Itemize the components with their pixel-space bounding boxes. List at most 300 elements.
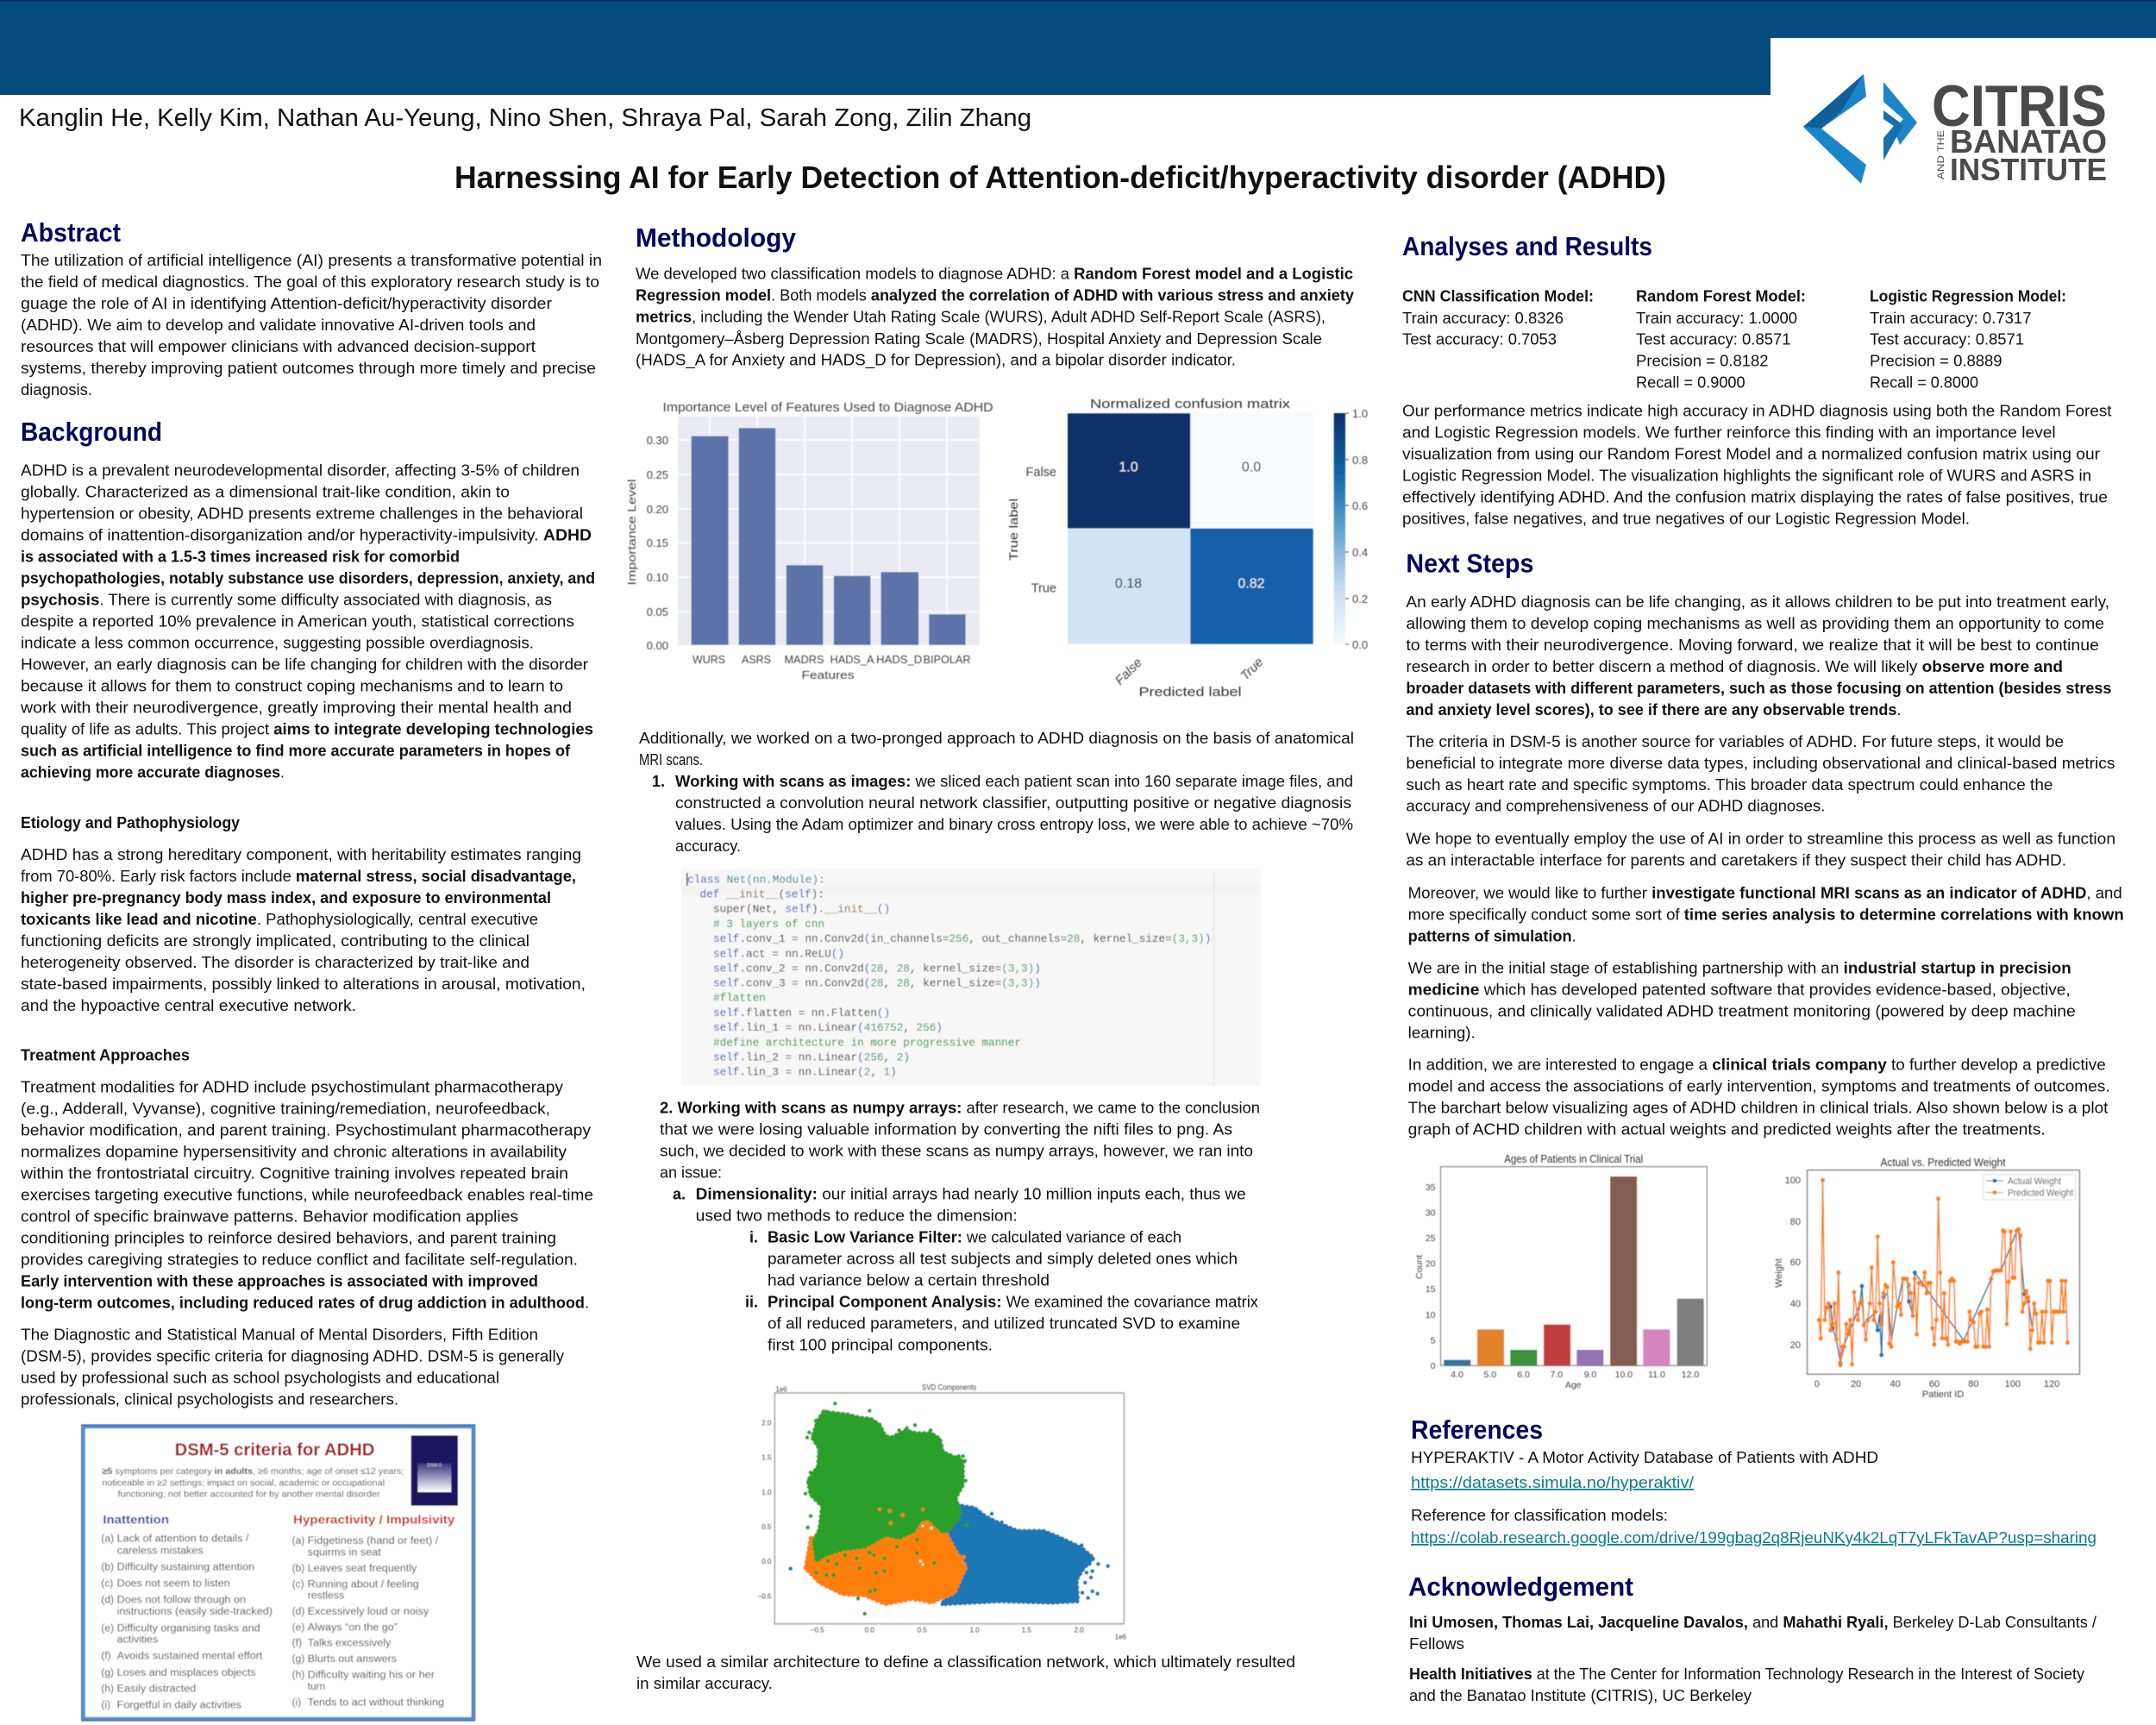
chart: ages of patients bars: 10.0 <box>1615 1370 1633 1380</box>
chart: normalized confusion matrix: True <box>1031 581 1056 595</box>
chart: ages of patients bars: 7.0 <box>1550 1370 1563 1380</box>
logo: CITRIS Banatao Institute: THE <box>1936 130 1946 152</box>
text: methodology intro: (HADS_A for Anxiety and HADS_D for Depression), and a bipolar disorder indicator. <box>636 352 1236 370</box>
text: acknowledgement: Health Initiatives at the The Center for Information Technology Research in the Interest of Society <box>1409 1665 2084 1683</box>
chart: ages of patients bars: 0 <box>1431 1361 1436 1371</box>
chart: normalized confusion matrix: False <box>1112 656 1145 688</box>
text: MRI approach: constructed a convolution neural network classifier, outputting positive or negative diagnosis <box>675 794 1351 812</box>
text: next steps paragraph 2: such as heart rate and specific symptoms. This broader data spectrum could enhance the <box>1406 776 2053 794</box>
code block: CNN class <box>681 869 1261 1086</box>
chart: actual vs predicted weight: 20 <box>1851 1379 1861 1389</box>
chart: actual vs predicted weight: 120 <box>2044 1379 2059 1389</box>
code block: CNN class: #define architecture in more progressive manner <box>713 1036 1021 1049</box>
chart: SVD components scatter: 0.0 <box>865 1627 874 1634</box>
text: MRI approach: values. Using the Adam optimizer and binary cross entropy loss, we were able to achieve ~70% <box>675 816 1353 833</box>
text: etiology: toxicants like lead and nicotine . Pathophysiologically, central executive <box>21 911 538 928</box>
text: methodology intro: Regression model. Both models analyzed the correlation of ADHD with various stress and anxiety <box>636 286 1354 304</box>
text: next steps paragraph 5: We are in the initial stage of establishing partnership with an industrial startup in precision <box>1408 959 2071 976</box>
legend: Actual Weight <box>2008 1176 2061 1187</box>
Hyperactivity list: Tends to act without thinking <box>308 1696 444 1708</box>
table: Random Forest metrics <box>1636 288 1806 391</box>
chart: normalized confusion matrix: 0.4 <box>1352 546 1368 559</box>
chart: actual vs predicted weight: Actual vs. Predicted Weight <box>1880 1156 2006 1169</box>
text: next steps paragraph 1: broader datasets with different parameters, such as those focusing on attention (besides stress <box>1406 680 2111 697</box>
DSM intro: ≥5 symptoms per category in adults, ≥6 months; age of onset ≤12 years; <box>102 1467 404 1477</box>
text: results summary: visualization from using our Random Forest Model and a normalized confusion matrix using our <box>1402 445 2100 462</box>
chart: feature importance bars: Importance Level of Features Used to Diagnose ADHD <box>662 400 993 415</box>
Inattention list: (g) <box>101 1666 114 1678</box>
Hyperactivity list: Always “on the go” <box>308 1621 398 1633</box>
text: acknowledgement <box>1409 1614 2096 1704</box>
table: Random Forest metrics: Precision = 0.8182 <box>1636 352 1769 369</box>
table: Logistic Regression metrics: Precision = 0.8889 <box>1870 352 2002 369</box>
table: CNN model metrics <box>1402 288 1594 348</box>
chart: feature importance bars <box>625 400 993 681</box>
chart: normalized confusion matrix: False <box>1026 466 1056 480</box>
DSM intro: noticeable in ≥2 settings; impact on social, academic or occupational <box>102 1478 385 1488</box>
code block: CNN class: self.lin_1 = nn.Linear(416752, 256) <box>713 1021 943 1034</box>
text: background: globally. Characterized as a dimensional trait-like condition, akin to <box>21 484 510 501</box>
chart: ages of patients bars: 4.0 <box>1451 1370 1463 1380</box>
chart: SVD components scatter: 1.0 <box>761 1489 772 1496</box>
chart: actual vs predicted weight: 40 <box>1890 1379 1901 1389</box>
Inattention list: (h) <box>101 1682 114 1694</box>
heading: Methodology: Methodology <box>636 223 797 253</box>
chart: ages of patients bars: 20 <box>1426 1259 1436 1270</box>
text: next steps paragraph 1: An early ADHD diagnosis can be life changing, as it allows children to be put into treatment early, <box>1406 593 2109 611</box>
text: numpy approach: a. <box>673 1185 686 1202</box>
chart: SVD components scatter: 1.5 <box>1022 1627 1031 1634</box>
chart: actual vs predicted weight <box>1774 1156 2079 1400</box>
text: next steps paragraph 1: research in order to better discern a method of diagnosis. We will likely observe more and <box>1406 658 2063 675</box>
chart: SVD components scatter: 0.0 <box>761 1558 772 1565</box>
chart: ages of patients bars: 5 <box>1431 1335 1436 1346</box>
Hyperactivity list: Leaves seat frequently <box>308 1562 417 1574</box>
chart: normalized confusion matrix: Predicted label <box>1138 685 1242 699</box>
code block: CNN class: super(Net, self).__init__() <box>713 903 890 916</box>
text: etiology: state-based impairments, possibly linked to alterations in arousal, motivation, <box>21 975 586 993</box>
chart: SVD components scatter: −0.5 <box>811 1627 824 1634</box>
table: Logistic Regression metrics: Logistic Regression Model: <box>1870 288 2066 305</box>
chart: normalized confusion matrix: Normalized confusion matrix <box>1090 397 1291 411</box>
chart: SVD components scatter: 0.5 <box>761 1523 772 1531</box>
Hyperactivity list: (h) <box>292 1669 304 1681</box>
text: DSM-5 description: used by professional such as school psychologists and educational <box>21 1370 499 1387</box>
Hyperactivity list: Blurts out answers <box>308 1653 397 1665</box>
Hyperactivity list: (g) <box>292 1653 304 1665</box>
code block: CNN class: self.lin_2 = nn.Linear(256, 2) <box>713 1051 910 1063</box>
legend <box>1984 1175 2076 1200</box>
chart: normalized confusion matrix: 0.8 <box>1352 454 1368 467</box>
title: Harnessing AI for Early Detection of Attention-deficit/hyperactivity disorder (ADHD) <box>454 160 1666 195</box>
chart: feature importance bars: Importance Level <box>625 479 638 585</box>
text: results summary: and Logistic Regression models. We further reinforce this finding with an importance level <box>1402 424 2056 442</box>
text: treatment: exercises targeting executive functions, while neurofeedback enables real-time <box>21 1187 593 1204</box>
text: next steps paragraph 6: In addition, we are interested to engage a clinical trials company to further develop a predictive <box>1408 1057 2106 1074</box>
text: abstract: (ADHD). We aim to develop and validate innovative AI-driven tools and <box>21 317 536 334</box>
chart: actual vs predicted weight: 100 <box>1785 1176 1801 1186</box>
Inattention list: Avoids sustained mental effort <box>117 1650 263 1662</box>
chart: ages of patients bars: 12.0 <box>1682 1370 1699 1380</box>
table: Logistic Regression metrics: Recall = 0.8000 <box>1870 373 1978 391</box>
text: next steps paragraph 3: as an interactable interface for parents and caretakers if they suspect their child has ADHD. <box>1406 851 2066 869</box>
logo: CITRIS Banatao Institute: INSTITUTE <box>1950 152 2107 187</box>
text: next steps paragraph 4 <box>1408 884 2124 944</box>
chart: ages of patients bars: 5.0 <box>1483 1370 1496 1380</box>
text: background: psychosis. There is currently some difficulty associated with diagnosis, as <box>21 592 552 609</box>
Hyperactivity list: Excessively loud or noisy <box>308 1605 429 1617</box>
text: background: such as artificial intelligence to find more accurate parameters in hopes of <box>21 743 571 760</box>
heading: Next Steps: Next Steps <box>1406 548 1533 578</box>
chart: actual vs predicted weight: 60 <box>1929 1379 1940 1389</box>
Inattention list: (e) <box>101 1622 114 1634</box>
text: next steps paragraph 1: allowing them to develop coping mechanisms as well as providing them an opportunity to come <box>1406 615 2104 632</box>
Inattention list: Inattention <box>103 1513 169 1527</box>
chart: ages of patients bars: 30 <box>1426 1208 1436 1218</box>
text: next steps paragraph 2: accuracy and comprehensiveness of our ADHD diagnoses. <box>1406 798 1825 815</box>
text: methodology intro: We developed two classification models to diagnose ADHD: a Random Forest model and a Logistic <box>636 266 1353 283</box>
table: Random Forest metrics: Random Forest Model: <box>1636 288 1806 305</box>
text: MRI approach: accuracy. <box>675 837 741 855</box>
text: MRI approach: MRI scans. <box>639 751 703 768</box>
table: Logistic Regression metrics <box>1870 288 2066 391</box>
heading: Abstract: Abstract <box>21 217 121 248</box>
chart: SVD components scatter: 1.0 <box>969 1627 980 1634</box>
text: background: because it allows for them to construct coping mechanisms and to learn to <box>21 678 563 695</box>
text: next steps paragraph 4: Moreover, we would like to further investigate functional MRI scans as an indicator of ADHD , and <box>1408 884 2122 901</box>
text: MRI approach: 1. <box>652 773 665 790</box>
text: abstract <box>21 252 602 398</box>
chart: SVD components scatter: 2.0 <box>1074 1627 1084 1634</box>
text: next steps paragraph 6: The barchart below visualizing ages of ADHD children in clinical trials. Also shown below is a plot <box>1408 1100 2108 1117</box>
text: treatment: long-term outcomes, including reduced rates of drug addiction in adulthood. <box>21 1294 589 1311</box>
chart: feature importance bars: 0.05 <box>647 605 668 618</box>
table: CNN model metrics: Train accuracy: 0.8326 <box>1402 310 1564 327</box>
text: background: hypertension or obesity, ADHD presents extreme challenges in the behavioral <box>21 505 583 523</box>
chart: feature importance bars: MADRS <box>785 653 824 666</box>
Hyperactivity list: (i) <box>292 1696 301 1708</box>
table: Logistic Regression metrics: Test accuracy: 0.8571 <box>1870 331 2024 348</box>
chart: SVD components scatter: 2.0 <box>761 1419 772 1427</box>
text: treatment: Early intervention with these approaches is associated with improved <box>21 1273 538 1290</box>
chart: ages of patients bars: Count <box>1414 1255 1425 1279</box>
table: Random Forest metrics: Recall = 0.9000 <box>1636 373 1745 391</box>
legend: Predicted Weight <box>2008 1189 2073 1199</box>
text: treatment <box>20 1078 593 1311</box>
text: abstract: the field of medical diagnostics. The goal of this exploratory research study is to <box>21 273 599 291</box>
chart: actual vs predicted weight: 80 <box>1790 1217 1801 1227</box>
DSM book cover <box>411 1435 458 1506</box>
Hyperactivity list <box>292 1513 455 1708</box>
code block: CNN class: self.lin_3 = nn.Linear(2, 1) <box>713 1066 897 1079</box>
Hyperactivity list: (c) <box>292 1578 304 1590</box>
text: numpy approach: Principal Component Analysis: We examined the covariance matrix <box>768 1294 1258 1311</box>
chart: normalized confusion matrix: True <box>1238 655 1266 683</box>
text: background: ADHD is a prevalent neurodevelopmental disorder, affecting 3-5% of children <box>21 462 580 480</box>
code block: CNN class: self.flatten = nn.Flatten() <box>713 1007 890 1019</box>
scatter clusters <box>788 1402 1110 1615</box>
text: etiology: higher pre-pregnancy body mass index, and exposure to environmental <box>21 889 551 906</box>
chart: feature importance bars: BIPOLAR <box>923 653 971 666</box>
table: Random Forest metrics: Train accuracy: 1.0000 <box>1636 310 1797 327</box>
text: similar architecture: in similar accuracy. <box>636 1675 773 1692</box>
text: next steps paragraph 1 <box>1406 593 2111 718</box>
Inattention list: Difficulty sustaining attention <box>117 1560 254 1572</box>
logo: CITRIS Banatao Institute: BANATAO <box>1950 124 2107 160</box>
text: results summary: Logistic Regression Model. The visualization highlights the significant role of WURS and ASRS in <box>1402 467 2091 485</box>
text: background: quality of life as adults. This project aims to integrate developing technologies <box>21 721 593 738</box>
chart: actual vs predicted weight: 20 <box>1790 1340 1801 1351</box>
text: MRI approach: Additionally, we worked on a two-pronged approach to ADHD diagnosis on the basis of anatomical <box>639 730 1354 747</box>
Hyperactivity list: (e) <box>292 1621 304 1633</box>
chart: SVD components scatter: 1e6 <box>1115 1634 1127 1641</box>
text: acknowledgement: and the Banatao Institute (CITRIS), UC Berkeley <box>1409 1687 1752 1704</box>
panel: DSM-5 criteria for ADHD <box>82 1425 475 1721</box>
chart: SVD components scatter <box>758 1383 1127 1641</box>
chart: normalized confusion matrix: True label <box>1006 499 1020 561</box>
text: treatment: Treatment modalities for ADHD include psychostimulant pharmacotherapy <box>21 1078 563 1095</box>
chart: SVD components scatter: −0.5 <box>758 1592 772 1600</box>
text: etiology: functioning deficits are strongly implicated, contributing to the clinical <box>21 932 530 950</box>
text: background: indicate a less common occurrence, suggesting possible overdiagnosis. <box>21 635 534 652</box>
chart: ages of patients bars: 25 <box>1426 1233 1436 1244</box>
chart: normalized confusion matrix: 1.0 <box>1352 407 1368 420</box>
Hyperactivity list: Hyperactivity / Impulsivity <box>293 1513 455 1527</box>
Hyperactivity list: squirms in seat <box>308 1546 381 1559</box>
text: next steps paragraph 2 <box>1406 733 2115 815</box>
text: treatment: conditioning principles to reinforce desired behaviors, and parent training <box>21 1230 556 1247</box>
chart: actual vs predicted weight: 40 <box>1790 1299 1801 1309</box>
text: numpy approach: used two methods to reduce the dimension: <box>696 1208 1018 1225</box>
chart: ages of patients bars: 11.0 <box>1648 1370 1665 1380</box>
Hyperactivity list: (d) <box>292 1605 304 1617</box>
text: treatment: behavior modification, and parent training. Psychostimulant pharmacotherapy <box>21 1121 591 1138</box>
heading: Background: Background <box>21 417 162 447</box>
chart: feature importance bars: 0.00 <box>647 639 668 652</box>
text: DSM-5 description <box>21 1327 564 1408</box>
text: treatment: control of specific brainwave patterns. Behavior modification applies <box>21 1208 518 1225</box>
text: acknowledgement: Fellows <box>1409 1635 1464 1653</box>
text: numpy approach: such, we decided to work with these scans as numpy arrays, however, we ran into <box>660 1143 1253 1160</box>
heading: References: References <box>1411 1414 1543 1445</box>
authors: Kanglin He, Kelly Kim, Nathan Au-Yeung, Nino Shen, Shraya Pal, Sarah Zong, Zilin Zhang <box>19 104 1031 132</box>
chart: actual vs predicted weight: 80 <box>1968 1379 1979 1389</box>
text: etiology: from 70-80%. Early risk factors include maternal stress, social disadvantage, <box>21 868 576 885</box>
chart: ages of patients bars: Age <box>1565 1380 1582 1390</box>
Inattention list: (i) <box>101 1699 110 1711</box>
code block: CNN class: # 3 layers of cnn <box>713 918 824 931</box>
chart: feature importance bars: 0.25 <box>647 468 668 481</box>
Hyperactivity list: (a) <box>292 1534 304 1546</box>
text: similar architecture: We used a similar architecture to define a classification network, which ultimately resulted <box>636 1653 1295 1671</box>
Inattention list: Forgetful in daily activities <box>117 1699 241 1711</box>
chart: SVD components scatter: 1.5 <box>761 1454 772 1462</box>
DSM intro <box>102 1467 404 1500</box>
Inattention list: (b) <box>101 1560 114 1572</box>
text: etiology <box>21 846 586 1014</box>
chart: normalized confusion matrix: 0.0 <box>1242 461 1261 474</box>
text: numpy approach <box>660 1100 1260 1354</box>
text: treatment: normalizes dopamine hypersensitivity and chronic alterations in availability <box>21 1144 567 1161</box>
Hyperactivity list: turn <box>308 1680 325 1692</box>
chart: feature importance bars: 0.10 <box>647 571 668 584</box>
DSM book cover: DSM-5 <box>427 1464 442 1469</box>
code block: CNN class: def __init__(self): <box>700 888 824 901</box>
chart: normalized confusion matrix <box>1006 397 1368 699</box>
code block: CNN class: self.conv_2 = nn.Conv2d(28, 28, kernel_size=(3,3)) <box>713 962 1041 975</box>
text: background: achieving more accurate diagnoses. <box>21 764 285 781</box>
chart: normalized confusion matrix: 0.18 <box>1115 576 1142 592</box>
table: Logistic Regression metrics: Train accuracy: 0.7317 <box>1870 310 2032 327</box>
Inattention list: (f) <box>101 1650 111 1662</box>
chart: ages of patients bars: 6.0 <box>1517 1370 1530 1380</box>
text: methodology intro <box>636 266 1354 370</box>
heading: Analyses and Results: Analyses and Results <box>1402 231 1652 261</box>
text: treatment: provides caregiving strategies to reduce conflict and facilitate self-regulation. <box>21 1251 578 1268</box>
Hyperactivity list: Fidgetiness (hand or feet) / <box>308 1534 439 1546</box>
text: next steps paragraph 1: to terms with their neurodivergence. Moving forward, we realize that it will be best to continue <box>1406 637 2099 654</box>
text: next steps paragraph 5: continuous, and clinically validated ADHD treatment monitoring (powered by deep machine <box>1408 1002 2076 1019</box>
Inattention list: Easily distracted <box>117 1682 196 1694</box>
chart: feature importance bars: 0.15 <box>647 536 668 549</box>
DSM intro: functioning; not better accounted for by another mental disorder <box>118 1490 380 1500</box>
text: next steps paragraph 5 <box>1408 959 2076 1041</box>
logo: CITRIS Banatao Institute: AND <box>1936 155 1946 179</box>
text: abstract: guage the role of AI in identifying Attention-deficit/hyperactivity disorder <box>21 295 552 312</box>
text: background: However, an early diagnosis can be life changing for children with the disorder <box>21 656 588 674</box>
text: methodology intro: Montgomery–Åsberg Depression Rating Scale (MADRS), Hospital Anxiety and Depression Scale <box>636 330 1322 348</box>
Inattention list: (c) <box>101 1577 113 1589</box>
text: background: work with their neurodivergence, greatly improving their mental health and <box>20 699 572 717</box>
chart: ages of patients bars: 9.0 <box>1584 1370 1596 1380</box>
chart: normalized confusion matrix: 1.0 <box>1119 461 1138 474</box>
text: numpy approach: an issue: <box>660 1164 722 1182</box>
subheading: Etiology and Pathophysiology: Etiology and Pathophysiology <box>21 814 240 831</box>
DSM title: DSM-5 criteria for ADHD <box>175 1441 374 1460</box>
Inattention list: (a) <box>101 1533 114 1545</box>
chart: actual vs predicted weight: Weight <box>1774 1258 1784 1288</box>
chart: normalized confusion matrix: 0.2 <box>1352 593 1368 605</box>
text: numpy approach: 2. Working with scans as numpy arrays: after research, we came to the conclusion <box>660 1100 1260 1117</box>
text: results summary: Our performance metrics indicate high accuracy in ADHD diagnosis using both the Random Forest <box>1402 403 2111 420</box>
text: next steps paragraph 1: and anxiety level scores), to see if there are any observable trends. <box>1406 701 1901 718</box>
Hyperactivity list: Running about / feeling <box>308 1578 419 1590</box>
Hyperactivity list: restless <box>308 1590 344 1602</box>
text: background: is associated with a 1.5-3 times increased risk for comorbid <box>21 549 460 566</box>
Hyperactivity list: Talks excessively <box>308 1637 391 1649</box>
text: numpy approach: Dimensionality: our initial arrays had nearly 10 million inputs each, thus we <box>696 1185 1246 1202</box>
code block: CNN class: self.conv_3 = nn.Conv2d(28, 28, kernel_size=(3,3)) <box>713 977 1041 990</box>
text: references <box>1411 1449 2096 1546</box>
text: references: https://colab.research.google.com/drive/199gbag2q8RjeuNKy4k2LqT7yLFkTavAP?usp=sharing <box>1411 1529 2096 1546</box>
text: etiology: ADHD has a strong hereditary component, with heritability estimates ranging <box>21 846 581 863</box>
text: references: Reference for classification models: <box>1411 1507 1668 1524</box>
text: abstract: systems, thereby improving patient outcomes through more timely and precise <box>21 360 596 377</box>
chart: normalized confusion matrix: 0.82 <box>1238 576 1265 592</box>
text: references: https://datasets.simula.no/hyperaktiv/ <box>1411 1474 1694 1491</box>
chart: ages of patients bars: Ages of Patients in Clinical Trial <box>1504 1152 1643 1165</box>
text: background: domains of inattention-disorganization and/or hyperactivity-impulsivity. ADHD <box>21 527 592 544</box>
text: numpy approach: of all reduced parameters, and utilized truncated SVD to examine <box>768 1314 1240 1332</box>
chart: SVD components scatter: 1e6 <box>775 1385 787 1393</box>
text: results summary <box>1402 403 2111 527</box>
Inattention list <box>101 1513 273 1711</box>
chart: feature importance bars: Features <box>802 668 855 681</box>
text: MRI approach: Working with scans as images: we sliced each patient scan into 160 separate image files, and <box>675 773 1353 790</box>
table: CNN model metrics: CNN Classification Model: <box>1402 288 1594 305</box>
chart: ages of patients bars <box>1414 1152 1707 1390</box>
text: next steps paragraph 6: model and access the associations of early intervention, symptoms and treatments of outcomes. <box>1408 1078 2110 1095</box>
code block: CNN class: #flatten <box>713 992 766 1005</box>
text: DSM-5 description: (DSM-5), provides specific criteria for diagnosing ADHD. DSM-5 is generally <box>21 1347 564 1364</box>
text: acknowledgement: Ini Umosen, Thomas Lai, Jacqueline Davalos, and Mahathi Ryali, Berkeley D-Lab Consultants / <box>1409 1614 2096 1631</box>
text: etiology: heterogeneity observed. The disorder is characterized by trait-like and <box>21 954 530 971</box>
Inattention list: Lack of attention to details / <box>117 1533 249 1545</box>
table: Random Forest metrics: Test accuracy: 0.8571 <box>1636 331 1790 348</box>
Hyperactivity list: (f) <box>292 1637 302 1649</box>
text: next steps paragraph 5: learning). <box>1408 1024 1476 1041</box>
chart: feature importance bars: 0.20 <box>647 503 668 516</box>
chart: ages of patients bars: 35 <box>1426 1182 1436 1193</box>
text: abstract: resources that will empower clinicians with advanced decision-support <box>21 338 536 355</box>
chart: normalized confusion matrix: 0.0 <box>1352 638 1368 651</box>
text: numpy approach: first 100 principal components. <box>768 1337 993 1354</box>
text: numpy approach: had variance below a certain threshold <box>768 1271 1050 1289</box>
chart: actual vs predicted weight: 100 <box>2005 1379 2021 1389</box>
chart: feature importance bars: WURS <box>693 653 725 666</box>
text: next steps paragraph 3 <box>1406 830 2115 869</box>
table: CNN model metrics: Test accuracy: 0.7053 <box>1402 331 1557 348</box>
chart: normalized confusion matrix: 0.6 <box>1352 499 1368 512</box>
code block: CNN class: self.act = nn.ReLU() <box>713 947 844 960</box>
actual weight line <box>1827 1229 2036 1363</box>
chart: actual vs predicted weight: Patient ID <box>1922 1389 1964 1400</box>
text: numpy approach: Basic Low Variance Filter: we calculated variance of each <box>768 1228 1181 1245</box>
Inattention list: Difficulty organising tasks and <box>117 1622 260 1634</box>
logo: CITRIS Banatao Institute: CITRIS <box>1932 73 2107 139</box>
chart: feature importance bars: HADS_A <box>830 653 874 666</box>
chart: actual vs predicted weight: 0 <box>1814 1379 1820 1389</box>
header bar <box>0 0 2156 95</box>
chart: feature importance bars: ASRS <box>742 653 771 666</box>
text: treatment: (e.g., Adderall, Vyvanse), cognitive training/remediation, neurofeedback, <box>21 1101 550 1118</box>
code block: CNN class: self.conv_1 = nn.Conv2d(in_channels=256, out_channels=28, kernel_size=(3,3)) <box>713 932 1211 945</box>
text: MRI approach <box>639 730 1354 855</box>
text: numpy approach: i. <box>749 1228 758 1245</box>
text: results summary: effectively identifying ADHD. And the confusion matrix displaying the rates of false positives, true <box>1402 489 2108 506</box>
text: next steps paragraph 4: patterns of simulation. <box>1408 927 1576 944</box>
text: next steps paragraph 5: medicine which has developed patented software that provides evidence-based, objective, <box>1408 981 2071 998</box>
text: DSM-5 description: professionals, clinical psychologists and researchers. <box>21 1390 398 1408</box>
code block: CNN class: class Net(nn.Module): <box>687 873 825 886</box>
text: references: HYPERAKTIV - A Motor Activity Database of Patients with ADHD <box>1411 1449 1878 1466</box>
text: numpy approach: ii. <box>745 1294 758 1311</box>
text: background: psychopathologies, notably substance use disorders, depression, anxiety, and <box>21 570 595 587</box>
text: background: despite a reported 10% prevalence in American youth, statistical corrections <box>21 613 574 630</box>
text: DSM-5 description: The Diagnostic and Statistical Manual of Mental Disorders, Fifth Edition <box>21 1327 538 1344</box>
chart: feature importance bars: HADS_D <box>876 653 922 666</box>
Hyperactivity list: Difficulty waiting his or her <box>308 1669 435 1681</box>
Inattention list: careless mistakes <box>117 1545 204 1557</box>
logo: CITRIS Banatao Institute <box>1803 73 2107 187</box>
text: next steps paragraph 3: We hope to eventually employ the use of AI in order to streamline this process as well as function <box>1406 830 2115 847</box>
chart: SVD components scatter: SVD Components <box>922 1383 977 1391</box>
chart: feature importance bars: 0.30 <box>647 434 668 447</box>
text: next steps paragraph 4: more specifically conduct some sort of time series analysis to determine correlations with known <box>1408 906 2124 923</box>
text: similar architecture <box>636 1653 1295 1692</box>
predicted weight line <box>1819 1180 2067 1365</box>
text: next steps paragraph 6: graph of ACHD children with actual weights and predicted weights after the treatments. <box>1408 1121 2046 1138</box>
